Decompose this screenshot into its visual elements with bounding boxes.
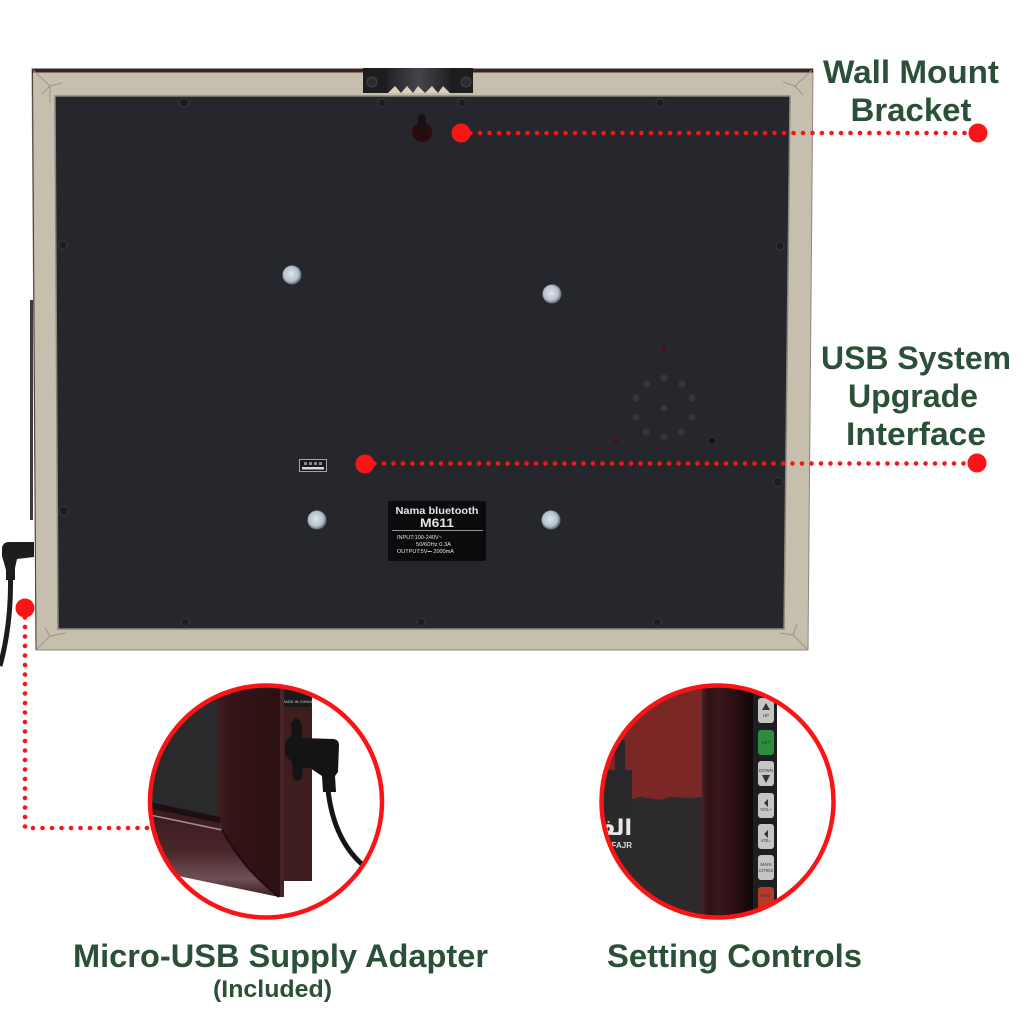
adapter dotted leader [25,608,152,828]
model label: OUTPUT:5V⎓ 2000mA [397,549,455,555]
vertical moulding [218,680,280,897]
zoom circle: controls: MAIN [760,862,772,867]
power cable [0,542,34,666]
arabic wordmark: الف [590,815,632,840]
callout: micro-USB adapter [16,598,488,1003]
adapter heading: Micro-USB Supply Adapter [73,938,488,974]
outer frame [32,69,813,650]
keyhole slot [412,114,432,142]
zoom circle: controls: L FAJR [605,841,632,850]
USB heading: Interface [846,416,986,452]
callout: setting controls [590,680,862,974]
model label: 50/60Hz 0.3A [416,542,452,548]
zoom circle: controls: VOL- [761,838,772,843]
zoom circle: controls: SET [762,740,771,745]
zoom circle: adapter: MADE IN CHINA [282,699,312,704]
zoom circle: controls: EXIT [761,893,771,898]
bottom moulding [152,809,278,897]
left edge of frame [30,300,33,520]
zoom circle: controls: VOL+ [760,807,772,812]
callout: wall mount bracket [452,54,999,142]
USB heading: Upgrade [848,378,978,414]
inner panel [55,96,790,629]
model label [388,501,486,561]
micro-USB plug [328,790,364,866]
rubber feet [282,266,562,530]
zoom circle: controls: UP [763,713,769,718]
included note: (Included) [213,976,332,1003]
controls heading: Setting Controls [607,938,862,974]
side panel [284,680,312,881]
wall mount bracket hardware [363,68,473,93]
model label: M611 [420,516,454,530]
zoom circle: controls [590,680,834,920]
wall mount heading: Bracket [850,92,972,128]
screws [59,98,784,626]
wall mount heading: Wall Mount [823,54,999,90]
product back panel photo [0,68,813,666]
zoom circle: controls: DOWN [759,768,773,773]
model label: INPUT:100-240V~ [397,535,442,541]
zoom circle: controls: CITIES [759,868,773,873]
speaker holes [614,346,714,444]
USB dotted leader [365,461,977,466]
model label: Nama bluetooth [396,505,478,517]
minaret silhouette [604,740,632,800]
USB port [300,460,326,472]
callout: USB system upgrade [356,340,1011,474]
corner marks [33,70,812,649]
zoom circle: adapter [140,680,382,918]
wall mount dotted leader [461,131,978,135]
USB heading: USB System [821,340,1011,376]
